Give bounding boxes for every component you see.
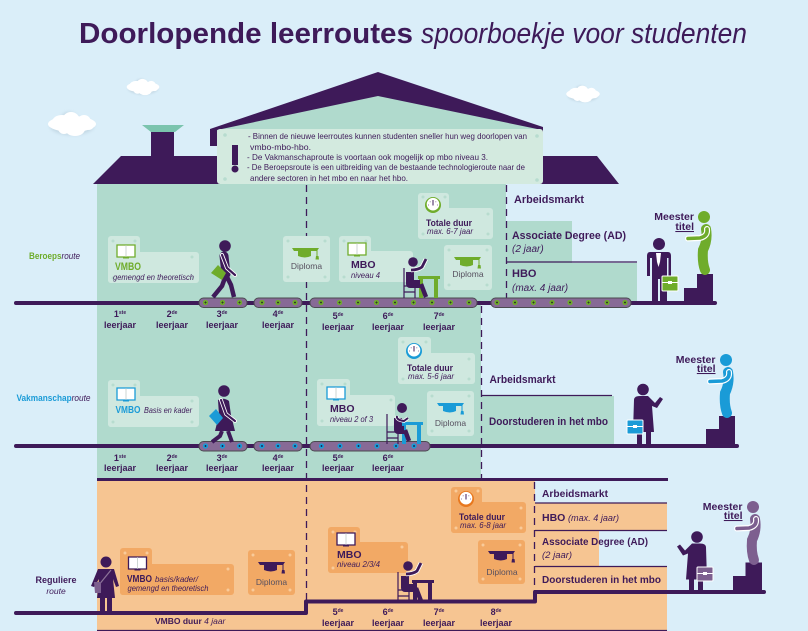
year labels: Vakmanschaproute: de [338,454,344,460]
year labels: Reguliere route: leerjaar [372,618,405,628]
year labels: Vakmanschaproute: leerjaar [322,463,355,473]
year labels: Vakmanschaproute: 4 [273,453,278,463]
year labels: Beroepsroute: leerjaar [104,320,137,330]
panel: MBO niveau 2 of 3: niveau 2 of 3 [330,414,373,424]
labels: outcomes Vakmanschaproute: Doorstuderen in het mbo [489,416,608,428]
year labels: Beroepsroute: leerjaar [322,322,355,332]
year labels: Vakmanschaproute: leerjaar [262,463,295,473]
title [79,18,747,50]
panel: MBO niveau 2/3/4: niveau 2/3/4 [337,559,380,569]
callout: note on the new learning routes: - Binnen de nieuwe leerroutes kunnen studenten sneller hun weg doorlopen van [248,131,527,141]
year labels: Beroepsroute: de [388,312,394,318]
route label: Reguliere route: Reguliere [35,575,77,585]
year labels: Reguliere route: de [388,608,394,614]
label: Meester titel green: Meester [654,211,694,223]
panel: Diploma vmbo Beroepsroute [283,236,330,282]
icon: stairs Reguliere route [733,562,762,592]
year labels: Beroepsroute: de [172,310,178,316]
labels: outcomes Beroepsroute: (2 jaar) [512,244,544,255]
year labels: Beroepsroute: de [278,310,284,316]
icon: master figure blue [710,354,732,413]
year labels: Vakmanschaproute: leerjaar [104,463,137,473]
year labels: Vakmanschaproute [104,453,405,473]
timeline: Beroepsroute [16,298,715,308]
year labels: Vakmanschaproute: de [222,454,228,460]
panel: VMBO basis/kader/gemengd en theoretisch: VMBO [127,573,152,585]
house with roof and chimney [93,72,619,184]
panel: MBO niveau 2/3/4 [328,527,408,573]
panel: Totale duur Beroepsroute [418,193,493,239]
panel: Diploma vmbo Reguliere route [248,550,295,595]
labels: outcomes Beroepsroute: HBO [512,268,537,280]
year labels: Vakmanschaproute: de [278,454,284,460]
icon: master figure green [688,211,710,270]
labels: outcomes Beroepsroute: Arbeidsmarkt [514,194,584,206]
panel: MBO niveau 4: MBO [351,259,376,271]
year labels: Beroepsroute: 4 [273,309,278,319]
panel: Totale duur Vakmanschaproute [398,337,475,384]
year labels: Reguliere route: 6 [383,607,388,617]
panel: Totale duur Vakmanschaproute: Totale duur [407,363,453,374]
year labels: Vakmanschaproute: 5 [333,453,338,463]
title: spoorboekje voor studenten [421,18,747,50]
panel: VMBO basis/kader/gemengd en theoretisch: basis/kader/ [155,574,200,584]
year labels: Beroepsroute [104,309,456,332]
labels: outcomes Reguliere route: Associate Degree (AD) [542,536,648,548]
year labels: Reguliere route: leerjaar [322,618,355,628]
year labels: Beroepsroute: 1 [114,309,119,319]
panel: VMBO Basis en kader [108,380,199,427]
year labels: Beroepsroute: leerjaar [372,322,405,332]
route label: Vakmanschaproute: Vakmanschaproute [16,393,90,403]
panel: Diploma mbo/hbo Reguliere route: Diploma [486,567,518,577]
year labels: Reguliere route: leerjaar [480,618,513,628]
callout: note on the new learning routes [217,129,543,184]
panel: Totale duur Reguliere route: max. 6-8 jaar [460,520,507,530]
year labels: Beroepsroute: leerjaar [262,320,295,330]
year labels: Beroepsroute: 2 [167,309,172,319]
year labels: Beroepsroute: de [222,310,228,316]
label: VMBO duur: VMBO duur 4 jaar [155,616,227,626]
labels: outcomes Vakmanschaproute [489,374,608,428]
divider lines [97,185,668,630]
panel: VMBO gemengd en theoretisch: VMBO [115,261,141,273]
panel: Totale duur Vakmanschaproute: max. 5-6 jaar [408,371,455,381]
labels: outcomes Beroepsroute [512,194,626,294]
label: Meester titel purple: Meester [703,501,742,513]
panel: Diploma Vakmanschaproute [427,391,474,436]
icon: walking student Beroepsroute [211,240,235,297]
year labels: Vakmanschaproute: leerjaar [206,463,239,473]
label: Meester titel green: titel [675,221,694,233]
panel: VMBO Basis en kader: VMBO [116,404,140,416]
panel: VMBO gemengd en theoretisch: gemengd en theoretisch [113,272,194,282]
icon: master figure purple [737,501,759,560]
panel: VMBO basis/kader/gemengd en theoretisch [120,548,234,595]
panel: orange zone for Reguliere route [97,480,667,631]
panel: MBO niveau 2 of 3 [317,379,395,426]
panel: Totale duur Beroepsroute: max. 6-7 jaar [427,226,474,236]
year labels: Beroepsroute: 5 [333,311,338,321]
labels: outcomes Vakmanschaproute: Arbeidsmarkt [490,374,556,386]
year labels: Reguliere route: de [338,608,344,614]
route label: Reguliere route [35,575,77,596]
icon: walking student Vakmanschaproute [209,385,235,442]
panel: Diploma vmbo Beroepsroute: Diploma [291,261,322,271]
label: Meester titel green [654,211,694,233]
panel: MBO niveau 2/3/4: MBO [337,549,362,561]
year labels: Beroepsroute: leerjaar [423,322,456,332]
year labels: Reguliere route: leerjaar [423,618,456,628]
callout: note on the new learning routes: vmbo-mbo-hbo. [250,142,311,152]
label: Meester titel blue [676,354,716,375]
panel: VMBO Basis en kader: Basis en kader [144,405,193,415]
panel: MBO niveau 4: niveau 4 [351,270,380,280]
panel: green zone for Beroepsroute and Vakmanschaproute [97,184,637,479]
icon: seated student with desk Vakmanschaproute [387,403,423,444]
labels: outcomes Reguliere route: HBO [542,512,565,524]
timeline: Reguliere route with steps [16,592,764,613]
panel: VMBO gemengd en theoretisch [108,236,199,283]
year labels: Reguliere route: 8 [491,607,496,617]
year labels: Beroepsroute: ste [119,310,126,316]
title: Doorlopende leerroutes [79,18,413,50]
label: Meester titel purple [703,501,743,522]
year labels: Vakmanschaproute: leerjaar [372,463,405,473]
year labels: Beroepsroute: 6 [383,311,388,321]
panel: Totale duur Reguliere route: Totale duur [459,512,505,523]
label: Meester titel blue: titel [697,363,716,375]
year labels: Beroepsroute: leerjaar [156,320,189,330]
callout: note on the new learning routes: andere sectoren in het mbo en naar het hbo. [250,173,408,183]
icon: stairs Vakmanschaproute [706,416,735,446]
year labels: Beroepsroute: 7 [434,311,439,321]
labels: outcomes Reguliere route [542,488,661,586]
icon: seated student with desk Reguliere route [398,561,434,602]
year labels: Beroepsroute: 3 [217,309,222,319]
labels: outcomes Reguliere route: (2 jaar) [542,550,572,561]
timeline: Vakmanschaproute [16,442,737,451]
icon: standing student Reguliere route [91,556,119,613]
panel: Diploma vmbo Reguliere route: Diploma [256,577,287,587]
year labels: Reguliere route: de [496,608,502,614]
route label: Beroepsroute: Beroepsroute [29,251,80,261]
year labels: Vakmanschaproute: ste [119,454,126,460]
panel: VMBO basis/kader/gemengd en theoretisch: gemengd en theoretisch [128,583,209,593]
callout: note on the new learning routes: - De Beroepsroute is een uitbreiding van de bestaande technologieroute naar de [247,162,525,172]
labels: outcomes Reguliere route: Doorstuderen in het mbo [542,574,661,586]
icon: seated student with desk Beroepsroute [404,257,440,298]
labels: outcomes Reguliere route: (max. 4 jaar) [568,513,619,524]
labels: outcomes Reguliere route: Arbeidsmarkt [542,488,608,500]
label: Meester titel blue: Meester [676,354,716,366]
year labels: Vakmanschaproute: 6 [383,453,388,463]
panel: Diploma hbo Beroepsroute [444,245,492,290]
icon: clouds [48,79,600,136]
year labels: Vakmanschaproute: de [388,454,394,460]
year labels: Vakmanschaproute: de [172,454,178,460]
year labels: Beroepsroute: de [439,312,445,318]
panel: MBO niveau 4 [339,236,413,282]
panel: MBO niveau 2 of 3: MBO [330,403,354,415]
year labels: Vakmanschaproute: 1 [114,453,119,463]
panel: Totale duur Beroepsroute: Totale duur [426,218,472,229]
route label: Reguliere route: route [46,586,66,596]
labels: outcomes Beroepsroute: Associate Degree (AD) [512,230,626,242]
callout: note on the new learning routes: - De Vakmanschaproute is voortaan ook mogelijk op mbo niveau 3. [247,152,488,162]
label: Meester titel purple: titel [724,510,743,522]
labels: outcomes Beroepsroute: (max. 4 jaar) [512,283,568,294]
panel: Totale duur Reguliere route [451,487,526,533]
year labels: Reguliere route: 5 [333,607,338,617]
year labels: Vakmanschaproute: leerjaar [156,463,189,473]
icon: graduate with purple briefcase [677,531,713,592]
panel: Diploma mbo/hbo Reguliere route [478,540,525,584]
year labels: Reguliere route: de [439,608,445,614]
year labels: Vakmanschaproute: 2 [167,453,172,463]
icon: graduate with blue briefcase [627,384,663,444]
icon: graduate in suit with green briefcase [647,238,678,301]
year labels: Beroepsroute: de [338,312,344,318]
icon: stairs Beroepsroute [684,274,713,303]
panel: Diploma hbo Beroepsroute: Diploma [452,269,484,279]
year labels: Reguliere route: 7 [434,607,439,617]
year labels: Beroepsroute: leerjaar [206,320,239,330]
panel: Diploma Vakmanschaproute: Diploma [435,418,466,428]
year labels: Reguliere route [322,607,513,628]
year labels: Vakmanschaproute: 3 [217,453,222,463]
